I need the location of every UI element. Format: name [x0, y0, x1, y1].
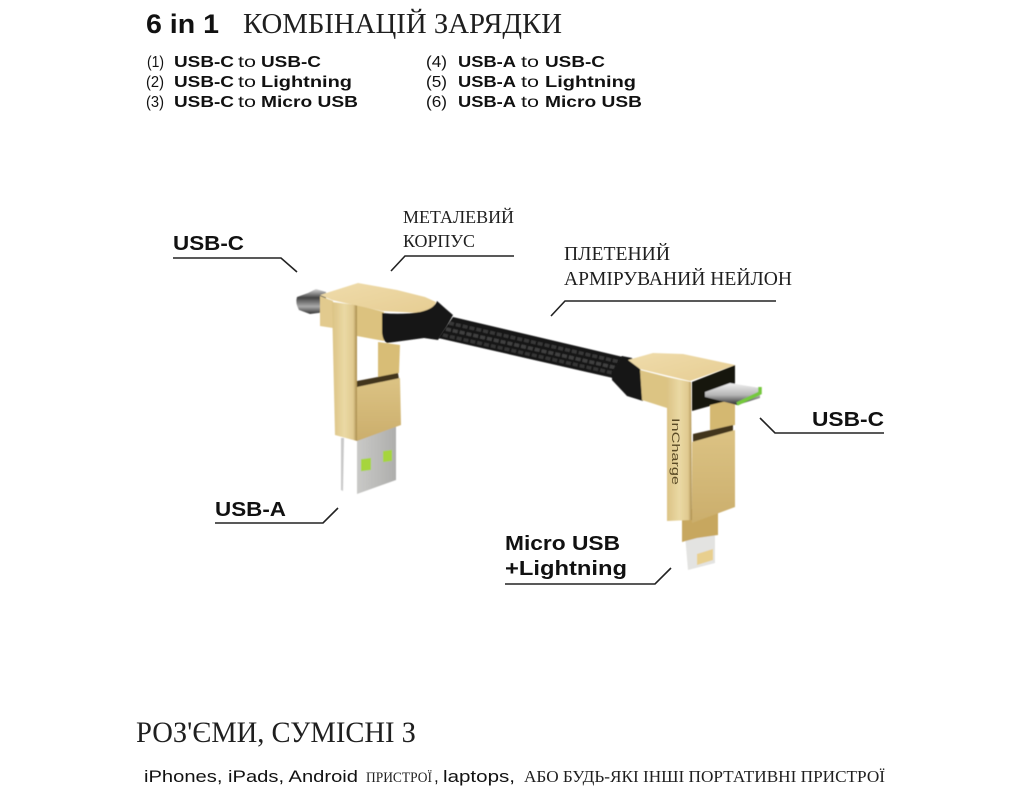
- list: USB-C combinations: (3): [146, 94, 164, 111]
- list: USB-A combinations: (5): [426, 74, 447, 91]
- list: USB-A combinations: Lightning: [545, 74, 636, 91]
- list: USB-C combinations: Lightning: [261, 74, 352, 91]
- compatible devices text: ,: [434, 767, 439, 786]
- list: USB-C combinations: to: [238, 94, 256, 111]
- label: USB-C right: [760, 409, 884, 433]
- list: USB-A combinations: (6): [426, 94, 447, 111]
- list: USB-A combinations: USB-A: [458, 54, 517, 71]
- label: Micro USB + Lightning: +Lightning: [505, 558, 627, 580]
- label: braided nylon: [551, 242, 792, 316]
- right connector: USB-C to Lightning: [612, 353, 760, 570]
- list: USB-C combinations: (1): [147, 54, 164, 71]
- Lightning and stem: [682, 502, 718, 570]
- compatible devices text: АБО БУДЬ-ЯКІ ІНШІ ПОРТАТИВНІ ПРИСТРОЇ: [524, 767, 885, 786]
- list: USB-A combinations: to: [521, 74, 539, 91]
- list: USB-C combinations: to: [238, 54, 256, 71]
- heading: compatible connectors: РОЗ'ЄМИ, СУМІСНІ З: [136, 716, 416, 749]
- label: metal body: МЕТАЛЕВИЙ: [403, 207, 514, 227]
- compatible devices text: laptops,: [443, 767, 515, 786]
- list: USB-C combinations: [146, 54, 358, 111]
- list: USB-C combinations: to: [238, 74, 256, 91]
- list: USB-A combinations: Micro USB: [545, 94, 642, 111]
- list: USB-C combinations: (2): [146, 74, 164, 91]
- title: 6 in 1: [146, 9, 219, 39]
- list: USB-A combinations: USB-A: [458, 74, 517, 91]
- metal body: [320, 283, 436, 441]
- brand mark on connector: InCharge: [669, 418, 681, 485]
- list: USB-A combinations: to: [521, 54, 539, 71]
- list: USB-A combinations: to: [521, 94, 539, 111]
- label: USB-A: USB-A: [215, 499, 286, 521]
- compatible devices text: ПРИСТРОЇ: [366, 769, 432, 786]
- label: USB-C left: USB-C: [173, 233, 244, 255]
- USB-C plug, left end: [296, 289, 326, 314]
- left connector: USB-C to USB-A: [296, 283, 453, 494]
- list: USB-C combinations: USB-C: [174, 54, 235, 71]
- compatible devices text: iPhones, iPads, Android: [144, 767, 358, 786]
- label: Micro USB + Lightning: [505, 533, 671, 584]
- label: USB-A: [215, 499, 338, 523]
- label: USB-C right: USB-C: [812, 409, 884, 431]
- label: metal body: КОРПУС: [403, 231, 475, 251]
- list: USB-C combinations: USB-C: [174, 94, 235, 111]
- list: USB-A combinations: (4): [426, 54, 447, 71]
- label: braided nylon: ПЛЕТЕНИЙ: [564, 242, 670, 265]
- label: USB-C left: [173, 233, 297, 272]
- label: metal body: [391, 207, 514, 271]
- label: Micro USB + Lightning: Micro USB: [505, 533, 620, 555]
- title: КОМБІНАЦІЙ ЗАРЯДКИ: [243, 8, 562, 40]
- black rubber boot: [382, 301, 453, 343]
- list: USB-A combinations: [426, 54, 642, 111]
- list: USB-C combinations: Micro USB: [261, 94, 358, 111]
- compatible devices text: [144, 767, 885, 786]
- list: USB-C combinations: USB-C: [174, 74, 235, 91]
- list: USB-C combinations: USB-C: [261, 54, 322, 71]
- label: braided nylon: АРМІРУВАНИЙ НЕЙЛОН: [564, 267, 792, 290]
- braided nylon cable: [438, 317, 623, 378]
- USB-C plug with green tip: [705, 383, 760, 405]
- metal body: [628, 353, 735, 523]
- list: USB-A combinations: USB-C: [545, 54, 606, 71]
- list: USB-A combinations: USB-A: [458, 94, 517, 111]
- black rubber boot: [612, 356, 643, 401]
- USB-A plug: [341, 424, 396, 494]
